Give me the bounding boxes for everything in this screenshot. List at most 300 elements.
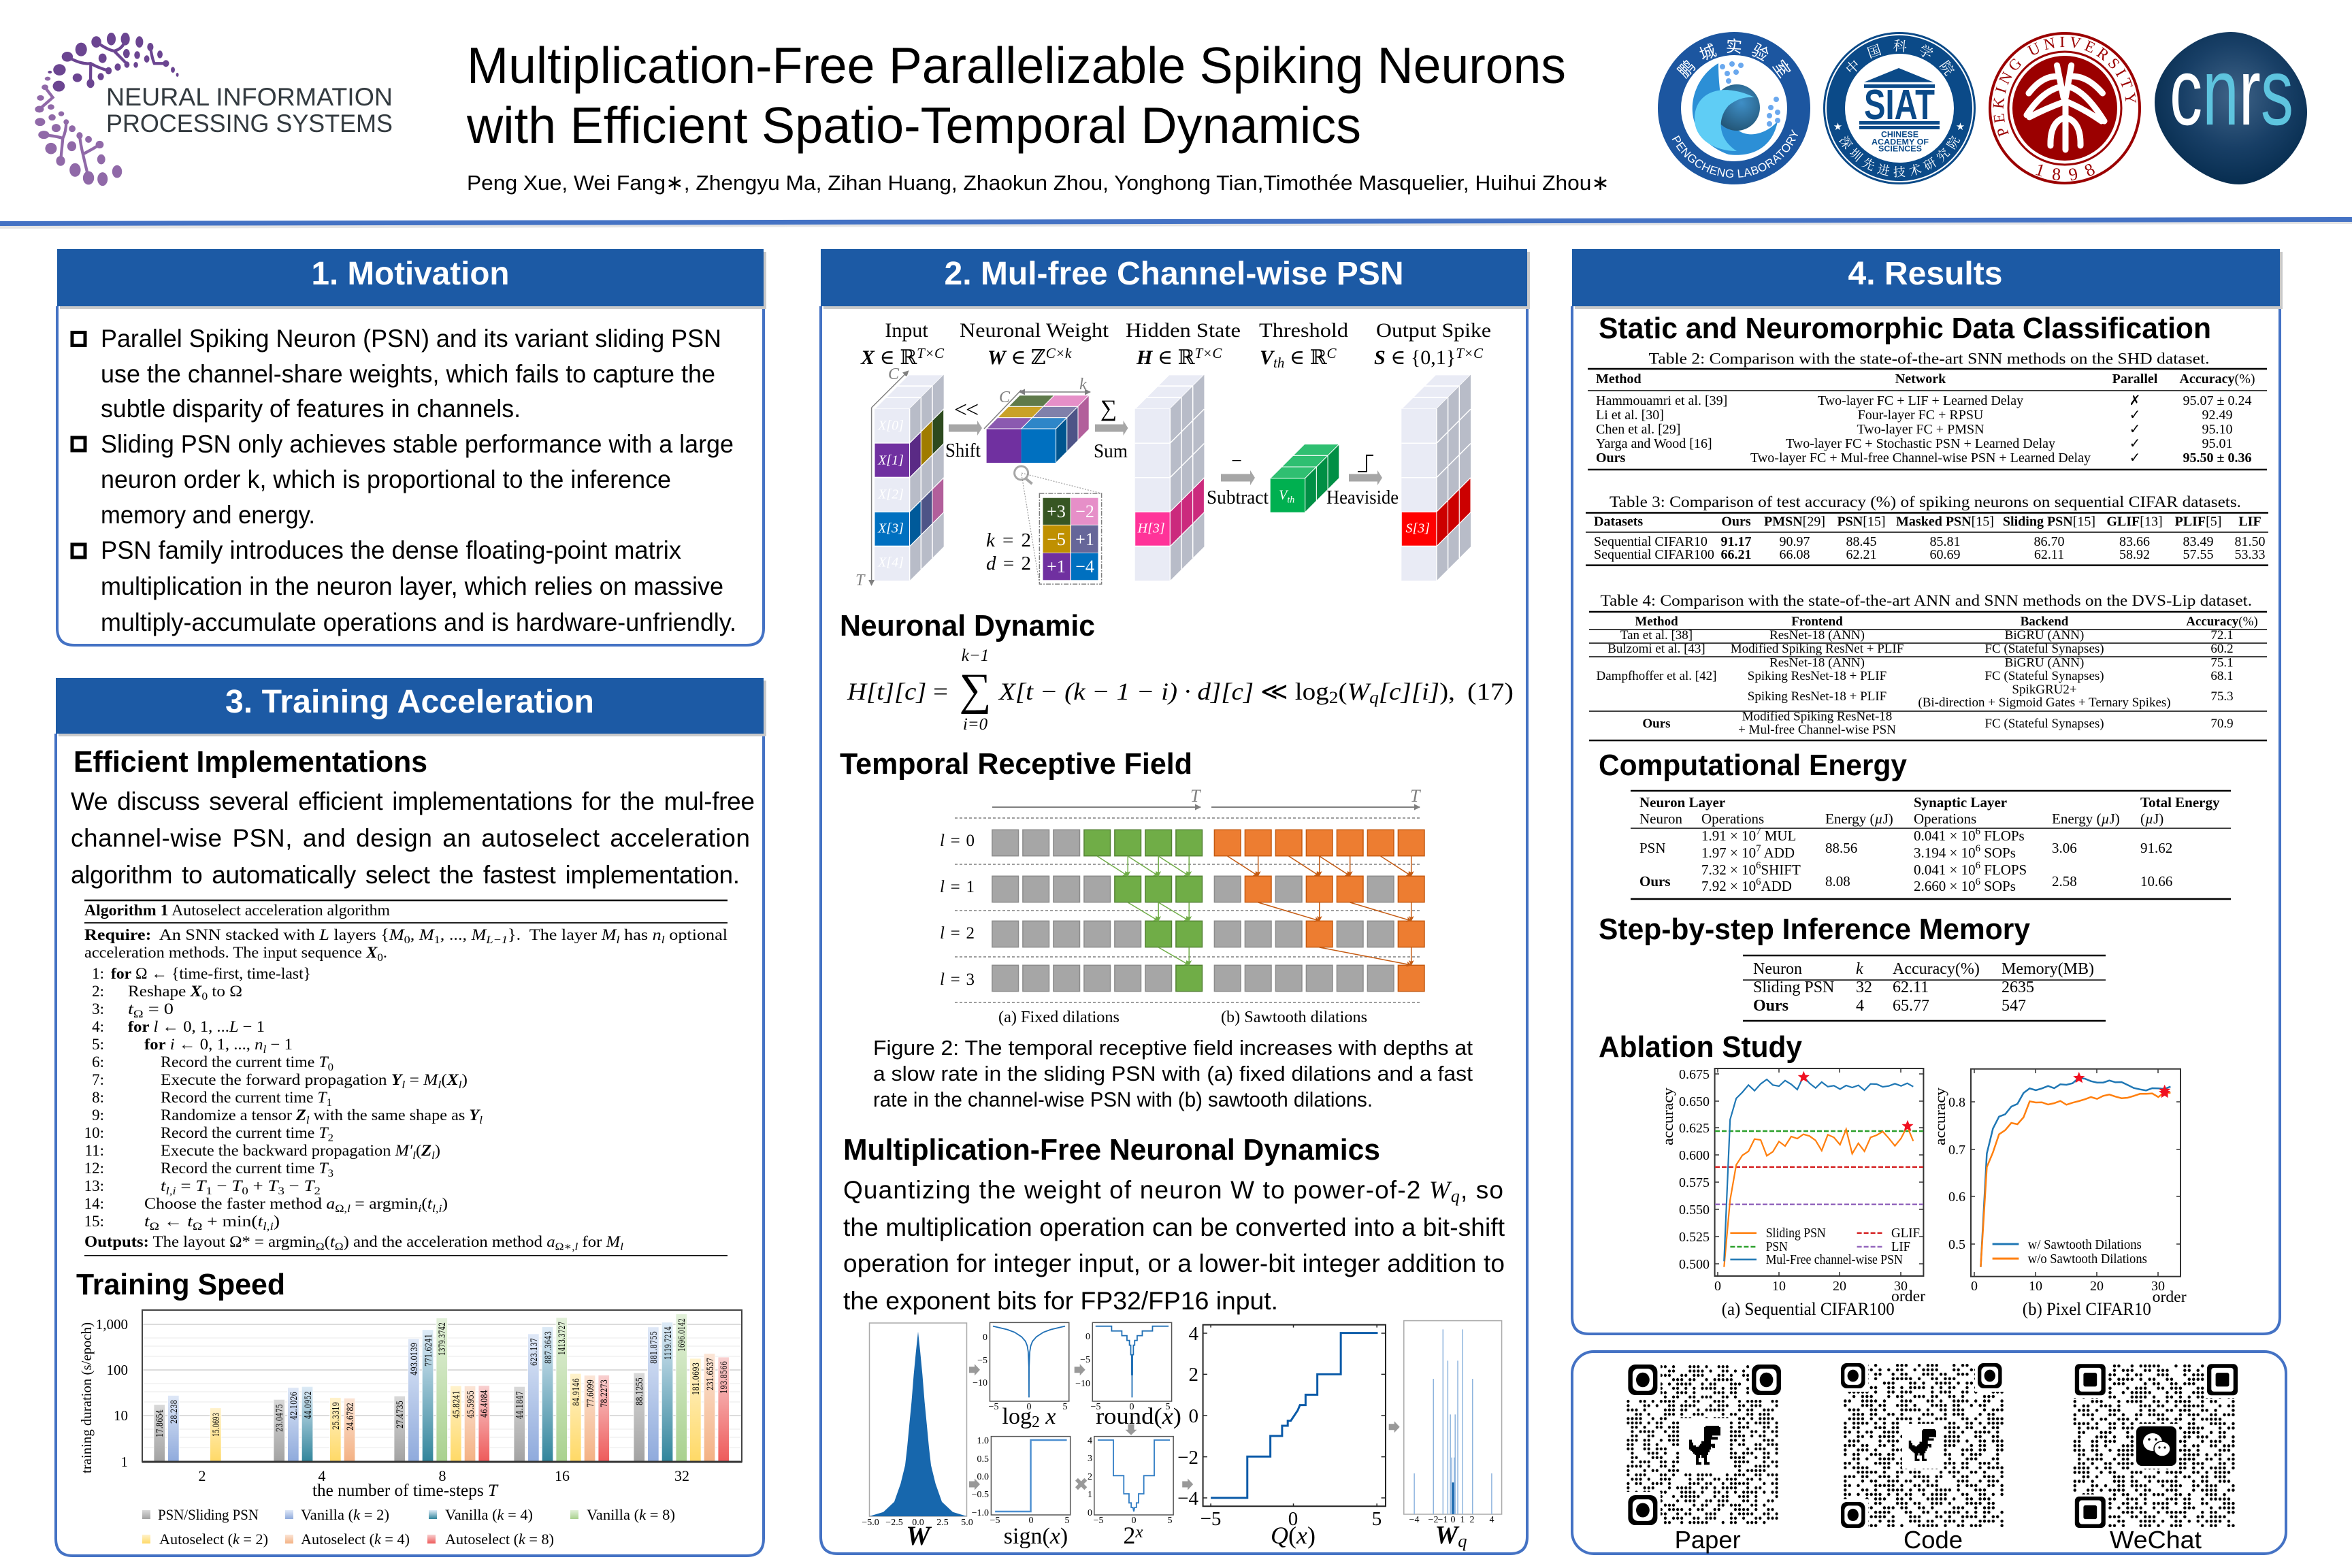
bar chart: training duration <box>78 1310 742 1548</box>
network diagram: k <box>1079 376 1087 393</box>
chart: Q(x): −2 <box>1177 1447 1198 1469</box>
operation labels: Sum <box>1094 441 1128 462</box>
table 2: Ours <box>1596 451 1626 466</box>
magnified weight values: k = 2 <box>986 529 1031 551</box>
logo: CNRS <box>2155 32 2307 184</box>
table 4: 68.1 <box>2210 669 2234 683</box>
chart: two power x: 0 <box>1088 1508 1092 1518</box>
line chart: pixel CIFAR10: 10 <box>2029 1279 2042 1294</box>
chart: two power x: 5 <box>1168 1516 1172 1526</box>
QR: Code <box>1840 1362 2004 1529</box>
algorithm box: Record the current time T1 <box>161 1089 332 1109</box>
magnified weight values: −4 <box>1075 557 1094 576</box>
table 3: 88.45 <box>1846 534 1877 549</box>
table 3: 66.21 <box>1720 547 1752 562</box>
chart legend <box>1993 1237 2147 1267</box>
logo: CNRS: cnrs <box>2170 38 2293 145</box>
layer labels: l = 0 <box>940 832 975 850</box>
header background <box>0 0 2352 219</box>
column headers: X ∈ ℝT×C <box>860 345 945 369</box>
gray inactive squares <box>992 830 1394 992</box>
table 3: Table 3: Comparison of test accuracy (%) of spiking neurons on sequential CIFAR datasets. <box>1610 493 2241 510</box>
panel header <box>57 249 764 306</box>
algorithm box: Record the current time T3 <box>161 1160 333 1179</box>
algorithm box: 4: <box>92 1018 104 1035</box>
chart: two power x: 3 <box>1088 1454 1092 1464</box>
heading: temporal receptive field: Temporal Receptive Field <box>840 747 1192 781</box>
bar value labels: 771.6241 <box>424 1334 434 1367</box>
bullet list: use the channel-share weights, which fails to capture the <box>101 360 715 388</box>
magnified weight values: −2 <box>1075 502 1094 521</box>
chart: Wq histogram: Wq <box>1435 1521 1467 1551</box>
output spike tensor S <box>1401 375 1471 581</box>
algorithm box: Require: An SNN stacked with L layers { M0, M1, ..., ML−1}. The layer Ml has nl optional <box>84 926 728 946</box>
algorithm box: 14: <box>84 1195 104 1212</box>
energy table: 7.92 × 106ADD <box>1701 877 1792 894</box>
operation labels: << <box>954 397 978 423</box>
diagram: dilations: T <box>1410 786 1421 806</box>
column headers: Vth ∈ ℝC <box>1260 345 1337 371</box>
fixed dilations squares <box>1084 830 1202 992</box>
table 4: Bulzomi et al. [43] <box>1607 642 1705 656</box>
description paragraph: We discuss several efficient implementations for the mul-free <box>71 787 755 815</box>
bar value labels: 493.0139 <box>410 1343 420 1375</box>
table 3: GLIF[13] <box>2106 514 2163 529</box>
table 2: Two-layer FC + PMSN <box>1857 422 1984 437</box>
bar value labels: 1119.7214 <box>664 1326 674 1360</box>
table 2: Two-layer FC + Stochastic PSN + Learned Delay <box>1786 436 2055 451</box>
energy table: 8.08 <box>1825 873 1850 889</box>
table 4: (Bi-direction + Sigmoid Gates + Ternary Spikes) <box>1918 696 2171 710</box>
magnified weight values: d = 2 <box>986 553 1031 574</box>
bar value labels: 15.0693 <box>212 1413 222 1437</box>
memory table: Ours <box>1753 997 1788 1015</box>
network diagram: T <box>855 572 866 589</box>
algorithm box: tΩ ← tΩ + min( tl,i) <box>144 1213 280 1232</box>
panel: 3. Training Acceleration <box>56 678 766 1556</box>
chart: two power x: −5 <box>1094 1516 1103 1526</box>
table 4: ResNet-18 (ANN) <box>1769 656 1865 670</box>
chart: log2: 5 <box>1063 1402 1067 1412</box>
layer labels: l = 2 <box>940 924 975 943</box>
algorithm box: 1: <box>92 965 104 982</box>
table 3: LIF <box>2238 514 2261 529</box>
chart: Wq histogram: −4 <box>1409 1515 1419 1525</box>
chart: W histogram <box>862 1323 973 1551</box>
figure 2 caption: Figure 2: The temporal receptive field increases with depths at <box>873 1036 1473 1060</box>
chart: Q(x): 2 <box>1188 1364 1198 1386</box>
chart: two power x <box>1088 1436 1173 1549</box>
figure 2 caption: a slow rate in the sliding PSN with (a) fixed dilations and a fast <box>873 1062 1473 1085</box>
y axis <box>96 1316 128 1470</box>
chart: round: −10 <box>1075 1379 1090 1389</box>
logo: Peking University <box>1989 32 2141 184</box>
bullet list: memory and energy. <box>101 501 315 529</box>
heading: step-by-step inference memory: Step-by-step Inference Memory <box>1599 913 2031 946</box>
legend <box>142 1506 675 1548</box>
energy table: 0.041 × 106 FLOPS <box>1914 860 2027 878</box>
x axis <box>199 1467 689 1484</box>
equation 17: ∑ <box>959 665 992 715</box>
chart: two power x: 2 <box>1088 1472 1092 1482</box>
panel: 3. Training Acceleration: 3. Training Acceleration <box>225 684 594 720</box>
memory table: 32 <box>1856 979 1872 996</box>
energy table: 1.97 × 107 ADD <box>1701 843 1795 861</box>
chart: log2: −10 <box>973 1378 987 1388</box>
algorithm box: Outputs: The layout Ω* = argmin Ω(tΩ) and the acceleration method aΩ∗,l for Ml <box>84 1233 624 1253</box>
line chart: pixel CIFAR10: 0.8 <box>1948 1095 1965 1110</box>
chart legend: w/ Sawtooth Dilations <box>2028 1237 2142 1252</box>
column headers: Output Spike <box>1376 319 1491 342</box>
energy table: Total Energy <box>2140 794 2220 811</box>
algorithm box: for l ← 0, 1, ... L − 1 <box>128 1018 265 1035</box>
table 4 <box>1589 592 2267 740</box>
line chart: sequential CIFAR100: accuracy <box>1659 1088 1676 1145</box>
chart: log2: 0 <box>1026 1402 1032 1412</box>
chart: Q(x): −4 <box>1177 1488 1198 1509</box>
panel: 2. Mul-free Channel-wise PSN: 2. Mul-free Channel-wise PSN <box>945 256 1403 292</box>
chart legend: PSN <box>1766 1239 1788 1254</box>
algorithm box: 9: <box>92 1107 104 1124</box>
figure 2 caption <box>873 1036 1473 1111</box>
table 3: Datasets <box>1594 514 1643 529</box>
line chart: pixel CIFAR10 <box>1931 1069 2187 1319</box>
bar value labels: 881.8755 <box>649 1331 659 1364</box>
table 3: Ours <box>1721 514 1751 529</box>
flow arrows <box>969 1364 1400 1494</box>
table 2: 95.10 <box>2202 422 2232 437</box>
table 3: PSN[15] <box>1837 514 1886 529</box>
chart: Q(x): 4 <box>1188 1323 1199 1345</box>
chart: round: 0 <box>1130 1402 1134 1412</box>
line chart: sequential CIFAR100 <box>1659 1067 1925 1319</box>
table 3: 81.50 <box>2235 534 2265 549</box>
legend: Autoselect (k = 8) <box>445 1531 554 1548</box>
logo: SIAT: 深圳先进技术研究院 <box>1839 135 1960 178</box>
table 4: 72.1 <box>2210 628 2234 642</box>
energy table: 2.660 × 106 SOPs <box>1914 877 2016 894</box>
input tensor X <box>875 375 944 581</box>
logo wordmark: PROCESSING SYSTEMS <box>106 110 393 137</box>
network diagram: C <box>999 389 1011 406</box>
table 2: Two-layer FC + LIF + Learned Delay <box>1818 393 2023 408</box>
chart: sign: 5 <box>1064 1516 1070 1526</box>
equation 17: H[t][c] = <box>847 678 948 705</box>
table 3: 62.11 <box>2034 547 2064 562</box>
bar value labels: 181.0693 <box>691 1362 702 1395</box>
table 2: Yarga and Wood [16] <box>1596 436 1712 451</box>
x axis: 16 <box>555 1467 570 1484</box>
line chart: sequential CIFAR100: 10 <box>1772 1279 1786 1294</box>
logo: SIAT: CHINESE <box>1881 130 1918 140</box>
logo wordmark: NEURAL INFORMATION <box>106 83 393 111</box>
table 4: FC (Stateful Synapses) <box>1984 717 2104 731</box>
algorithm box: 2: <box>92 983 104 1000</box>
x axis: 32 <box>674 1467 689 1484</box>
energy table: 3.06 <box>2052 840 2077 856</box>
chart: round <box>1075 1322 1181 1429</box>
bar value labels: 623.137 <box>529 1338 540 1366</box>
bar value labels: 45.5955 <box>466 1390 476 1418</box>
layer labels: l = 3 <box>940 970 975 989</box>
hidden state tensor H <box>1135 375 1204 581</box>
legend: Vanilla (k = 8) <box>587 1506 675 1523</box>
energy table: Operations <box>1701 811 1764 827</box>
line chart: pixel CIFAR10: 0.7 <box>1948 1143 1965 1158</box>
bullet list: multiply-accumulate operations and is hardware-unfriendly. <box>101 608 736 636</box>
heading: training speed: Training Speed <box>76 1268 285 1301</box>
threshold block Vth <box>1271 444 1339 512</box>
quantization charts <box>862 1321 1502 1551</box>
diagram: dilations: T <box>1190 786 1201 806</box>
panel: QR codes <box>1572 1352 2286 1554</box>
legend: Vanilla (k = 2) <box>301 1506 389 1523</box>
y tick labels: 0.600 <box>1679 1148 1710 1163</box>
table 2: 92.49 <box>2202 408 2232 423</box>
table 3: 53.33 <box>2235 547 2265 562</box>
chart: Q(x): 0 <box>1188 1405 1198 1427</box>
chart: Wq histogram: −1 <box>1438 1515 1448 1525</box>
bar value labels: 27.4735 <box>395 1401 406 1428</box>
chart: Wq histogram: −2 <box>1428 1515 1438 1525</box>
panel: 1. Motivation <box>57 249 766 645</box>
QR labels <box>1675 1526 2202 1554</box>
table 4: Dampfhoffer et al. [42] <box>1597 669 1716 683</box>
icon: wechat <box>2136 1426 2176 1466</box>
chart: round: round(x) <box>1096 1404 1181 1429</box>
algorithm box: for i ← 0, 1, ..., nl − 1 <box>144 1036 293 1056</box>
chart: log2: 0 <box>983 1333 987 1343</box>
equation 17: X[t − (k − 1 − i) · d][c] ≪ log 2(Wq[c][i]), <box>998 678 1455 707</box>
table 4: Spiking ResNet-18 + PLIF <box>1748 669 1886 683</box>
QR: Paper <box>1627 1363 1783 1527</box>
table 4: Tan et al. [38] <box>1620 628 1693 642</box>
bar value labels: 44.1847 <box>515 1391 525 1419</box>
bullet list: Parallel Spiking Neuron (PSN) and its variant sliding PSN <box>101 325 721 353</box>
table 4: 60.2 <box>2210 642 2234 656</box>
chart: Wq histogram <box>1404 1321 1502 1551</box>
table 3: Sequential CIFAR100 <box>1594 547 1714 562</box>
column headers <box>860 319 1491 371</box>
memory table: Sliding PSN <box>1753 979 1834 996</box>
algorithm box: Execute the forward propagation Yl = Ml(Xl) <box>161 1071 468 1091</box>
table 2: Four-layer FC + RPSU <box>1858 408 1984 423</box>
x axis: 4 <box>318 1467 325 1484</box>
output spike tensor S: S[3] <box>1406 521 1430 536</box>
bar chart: training duration: training duration (s/epoch) <box>78 1322 95 1473</box>
bar value labels: 78.2273 <box>600 1379 610 1407</box>
green connection arrows <box>1097 856 1189 965</box>
chart: Wq histogram: 4 <box>1489 1515 1494 1525</box>
operation labels: − <box>1231 451 1242 472</box>
bar value labels: 45.8241 <box>452 1390 462 1418</box>
bullet list: Sliding PSN only achieves stable performance with a large <box>101 430 734 458</box>
table 3: 58.92 <box>2119 547 2150 562</box>
heading: neuronal dynamic: Neuronal Dynamic <box>840 609 1095 642</box>
chart: sign: sign(x) <box>1004 1524 1068 1549</box>
energy table: 7.32 × 106SHIFT <box>1701 860 1801 878</box>
bar value labels: 23.0475 <box>275 1404 285 1432</box>
operation labels: Heaviside <box>1326 487 1399 508</box>
chart: round: 5 <box>1165 1402 1171 1412</box>
magnified weight values: +1 <box>1075 529 1094 549</box>
table 2: Chen et al. [29] <box>1596 422 1680 437</box>
algorithm box: Choose the faster method aΩ,l = argmin i(tl,i) <box>144 1195 448 1215</box>
legend: PSN/Sliding PSN <box>158 1506 259 1523</box>
operation labels: ∑ <box>1100 396 1117 421</box>
bar value labels: 46.4084 <box>480 1390 490 1418</box>
bar value labels: 25.3319 <box>331 1402 342 1430</box>
table 4: Table 4: Comparison with the state-of-the-art ANN and SNN methods on the DVS-Lip dataset. <box>1601 592 2252 609</box>
hidden state tensor H: H[3] <box>1137 521 1165 536</box>
memory table: 65.77 <box>1893 997 1929 1015</box>
line chart: sequential CIFAR100: 0 <box>1714 1279 1721 1294</box>
authors: Peng Xue, Wei Fang∗, Zhengyu Ma, Zihan Huang, Zhaokun Zhou, Yonghong Tian,Timothée Masquelier, Huihui Zhou∗ <box>467 171 1610 195</box>
diagram: dilations <box>940 786 1424 1026</box>
table 2: Parallel <box>2112 372 2158 387</box>
energy table: (µJ) <box>2140 811 2163 827</box>
table 4: Modified Spiking ResNet-18 <box>1742 710 1892 724</box>
chart legend: GLIF <box>1891 1226 1920 1241</box>
chart legend <box>1730 1226 1920 1267</box>
chart: Q(x): Q(x) <box>1271 1522 1316 1549</box>
logo: SIAT: ACADEMY OF <box>1872 137 1929 146</box>
energy table <box>1631 791 2231 899</box>
equation 17: k−1 <box>962 647 989 665</box>
bar chart: training duration: the number of time-steps T <box>312 1482 499 1500</box>
algorithm box: 5: <box>92 1036 104 1053</box>
energy table: Energy (µJ) <box>2052 811 2120 827</box>
logo: Peking University: 1898 <box>2036 164 2095 181</box>
energy table: 1.91 × 107 MUL <box>1701 826 1796 844</box>
flow arrows: ✖ <box>1074 1474 1089 1494</box>
table 4: + Mul-free Channel-wise PSN <box>1738 723 1896 737</box>
table 4: 70.9 <box>2210 717 2234 731</box>
bar value labels: 1379.3742 <box>438 1322 448 1356</box>
bar value labels: 193.8566 <box>719 1361 730 1394</box>
bar value labels: 231.6537 <box>706 1358 716 1390</box>
table 2: ✓ <box>2129 422 2140 437</box>
table 3: PLIF[5] <box>2175 514 2221 529</box>
chart: Q(x) <box>1177 1323 1386 1549</box>
table 4: 75.3 <box>2210 689 2234 704</box>
chart: W histogram: 5.0 <box>961 1518 973 1528</box>
line chart: pixel CIFAR10: 0.5 <box>1948 1237 1965 1252</box>
paragraph: the multiplication operation can be converted into a bit-shift <box>843 1213 1505 1241</box>
chart: Q(x): 5 <box>1372 1508 1382 1530</box>
energy table: 2.58 <box>2052 873 2077 889</box>
layer labels: l = 1 <box>940 878 975 896</box>
description paragraph <box>71 787 755 889</box>
figure 2 caption: rate in the channel-wise PSN with (b) sawtooth dilations. <box>873 1088 1373 1111</box>
bullet list <box>72 325 736 636</box>
magnified weight values: +1 <box>1047 557 1066 576</box>
description paragraph: algorithm to automatically select the fastest implementation. <box>71 861 740 889</box>
bullet list: neuron order k, which is proportional to the inference <box>101 466 671 493</box>
bullet list: PSN family introduces the dense floating-point matrix <box>101 536 681 564</box>
algorithm box: 13: <box>84 1177 104 1194</box>
logo: SIAT: SIAT <box>1864 82 1935 129</box>
table 3: 57.55 <box>2183 547 2213 562</box>
chart: sign: −1.0 <box>972 1508 989 1518</box>
algorithm box: 7: <box>92 1071 104 1088</box>
orange connection arrows <box>1228 856 1411 965</box>
bar value labels: 1696.0142 <box>677 1318 687 1352</box>
bar value labels: 17.8654 <box>155 1409 165 1437</box>
energy table: Synaptic Layer <box>1914 794 2007 811</box>
logo: Pengcheng Laboratory: 鹏城实验室 <box>1676 38 1791 79</box>
chart: log2: −5 <box>977 1356 987 1366</box>
table 4: FC (Stateful Synapses) <box>1984 642 2104 656</box>
heading: ablation study: Ablation Study <box>1599 1030 1803 1064</box>
icon: dino <box>1909 1429 1936 1461</box>
logo: Peking University: PEKING UNIVERSITY <box>1993 37 2136 137</box>
legend: Autoselect (k = 4) <box>301 1531 410 1548</box>
panel header <box>1572 249 2280 306</box>
chart: two power x: 2x <box>1123 1522 1143 1549</box>
chart: two power x: 1 <box>1088 1490 1092 1500</box>
y tick labels: 0.550 <box>1679 1203 1710 1218</box>
algorithm box: Record the current time T0 <box>161 1054 333 1073</box>
y axis: 1,000 <box>96 1316 128 1333</box>
algorithm box: tΩ = 0 <box>128 1000 174 1020</box>
table 2: Method <box>1596 372 1642 387</box>
input tensor X: X[1] <box>877 453 904 468</box>
QR labels: Paper <box>1675 1526 1741 1554</box>
operation labels <box>945 396 1399 508</box>
chart: log2: log2 x <box>1002 1404 1056 1431</box>
table 2: Accuracy(%) <box>2179 372 2255 387</box>
table 2: ✓ <box>2129 451 2140 466</box>
legend: Autoselect (k = 2) <box>159 1531 268 1548</box>
chart: Wq histogram: 2 <box>1470 1515 1474 1525</box>
layer labels: (b) Sawtooth dilations <box>1221 1009 1367 1026</box>
paragraph <box>843 1176 1505 1315</box>
algorithm box: Reshape X0 to Ω <box>128 983 242 1002</box>
chart: Q(x): 0 <box>1288 1508 1298 1530</box>
logo wordmark <box>106 83 393 137</box>
network diagram: C <box>888 365 900 383</box>
table 4: Method <box>1635 615 1678 629</box>
table 4: ResNet-18 (ANN) <box>1769 628 1865 642</box>
bar value labels: 887.3643 <box>544 1331 554 1364</box>
paragraph: Quantizing the weight of neuron W to power-of-2 Wq, so <box>843 1176 1503 1206</box>
axes for input tensor <box>872 371 1090 585</box>
arrows between stages <box>949 421 1382 485</box>
line chart: pixel CIFAR10: 0 <box>1971 1279 1978 1294</box>
energy table: 10.66 <box>2140 873 2172 889</box>
memory table: 2635 <box>2002 979 2034 996</box>
line chart: pixel CIFAR10: 0.6 <box>1948 1190 1965 1205</box>
table 2: Hammouamri et al. [39] <box>1596 393 1727 408</box>
logo: SIAT: SCIENCES <box>1878 144 1922 154</box>
column headers: S ∈ {0,1}T×C <box>1374 345 1484 369</box>
logo: SIAT <box>1823 32 1976 184</box>
energy table: Operations <box>1914 811 1976 827</box>
algorithm box: 12: <box>84 1160 104 1177</box>
table 3 <box>1586 493 2268 566</box>
y tick labels: 0.625 <box>1679 1121 1710 1136</box>
table 2 <box>1588 350 2267 470</box>
QR: WeChat <box>2073 1362 2240 1530</box>
layer labels <box>940 832 1367 1026</box>
network diagram <box>855 319 1491 589</box>
heading: multiplication-free neuronal dynamics: Multiplication-Free Neuronal Dynamics <box>843 1133 1380 1166</box>
bar value labels: 1413.3727 <box>557 1322 568 1355</box>
line chart: pixel CIFAR10: 30 <box>2151 1279 2165 1294</box>
magnified weight values: +3 <box>1047 502 1066 521</box>
bar value labels: 42.1026 <box>289 1392 299 1420</box>
